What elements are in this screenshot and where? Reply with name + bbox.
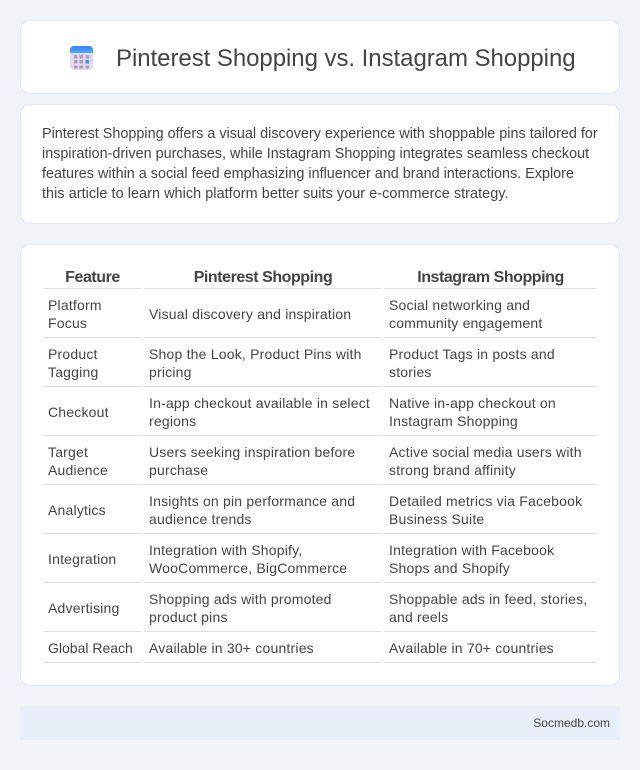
row: Platform Focus: Focus [48, 315, 87, 331]
row: Product Tagging: Shop the Look, Product Pins with [149, 346, 362, 362]
row: Target Audience [43, 444, 597, 485]
row: Integration: Integration with Facebook [389, 542, 554, 558]
row: Advertising: and reels [389, 609, 448, 625]
intro paragraph: this article to learn which platform better suits your e-commerce strategy. [42, 186, 509, 202]
row: Global Reach: Global Reach [48, 640, 133, 656]
row: Analytics: audience trends [149, 511, 252, 527]
row: Analytics: Detailed metrics via Facebook [389, 493, 582, 509]
row: Checkout: regions [149, 413, 196, 429]
row: Product Tagging [43, 346, 597, 387]
row: Product Tagging: stories [389, 364, 432, 380]
row: Platform Focus: Social networking and [389, 297, 530, 313]
intro paragraph: features within a social feed emphasizing influencer and brand interactions. Explore [42, 166, 574, 182]
row: Target Audience: purchase [149, 462, 208, 478]
intro paragraph: Pinterest Shopping offers a visual discovery experience with shoppable pins tailored for [42, 126, 598, 142]
row: Platform Focus: community engagement [389, 315, 542, 331]
table header: Instagram Shopping [417, 269, 564, 286]
icon: calendar [70, 46, 93, 70]
row: Analytics: Analytics [48, 502, 106, 518]
row: Checkout [43, 395, 597, 436]
row: Integration: Integration [48, 551, 116, 567]
title panel [20, 20, 620, 94]
row: Global Reach [43, 640, 597, 663]
row: Target Audience: Target [48, 444, 88, 460]
row: Integration: Integration with Shopify, [149, 542, 302, 558]
row: Analytics: Business Suite [389, 511, 484, 527]
footer bar [20, 706, 620, 740]
row: Target Audience: strong brand affinity [389, 462, 516, 478]
row: Analytics [43, 493, 597, 534]
row: Checkout: In-app checkout available in select [149, 395, 370, 411]
row: Product Tagging: Product [48, 346, 98, 362]
row: Platform Focus [43, 297, 597, 338]
row: Platform Focus: Platform [48, 297, 102, 313]
row: Checkout: Instagram Shopping [389, 413, 518, 429]
title: Pinterest Shopping vs. Instagram Shopping [116, 45, 576, 72]
row: Analytics: Insights on pin performance and [149, 493, 355, 509]
row: Advertising: product pins [149, 609, 228, 625]
row: Target Audience: Active social media users with [389, 444, 582, 460]
intro paragraph [42, 126, 598, 202]
row: Advertising: Advertising [48, 600, 119, 616]
row: Integration: WooCommerce, BigCommerce [149, 560, 347, 576]
panel: intro text [20, 104, 620, 224]
row: Target Audience: Users seeking inspiration before [149, 444, 355, 460]
row: Global Reach: Available in 30+ countries [149, 640, 314, 656]
row: Product Tagging: Tagging [48, 364, 98, 380]
row: Global Reach: Available in 70+ countries [389, 640, 554, 656]
row: Product Tagging: pricing [149, 364, 192, 380]
table header [43, 269, 597, 289]
row: Checkout: Native in-app checkout on [389, 395, 556, 411]
row: Integration: Shops and Shopify [389, 560, 510, 576]
row: Advertising [43, 591, 597, 632]
row: Advertising: Shoppable ads in feed, stories, [389, 591, 587, 607]
row: Target Audience: Audience [48, 462, 108, 478]
row: Integration [43, 542, 597, 583]
row: Platform Focus: Visual discovery and inspiration [149, 306, 351, 322]
row: Product Tagging: Product Tags in posts and [389, 346, 555, 362]
table header: Feature [65, 269, 120, 286]
panel: comparison table [20, 244, 620, 686]
row: Advertising: Shopping ads with promoted [149, 591, 332, 607]
row: Checkout: Checkout [48, 404, 109, 420]
footer credit: Socmedb.com [533, 716, 610, 730]
table header: Pinterest Shopping [194, 269, 332, 286]
intro paragraph: inspiration-driven purchases, while Instagram Shopping integrates seamless checkout [42, 146, 589, 162]
